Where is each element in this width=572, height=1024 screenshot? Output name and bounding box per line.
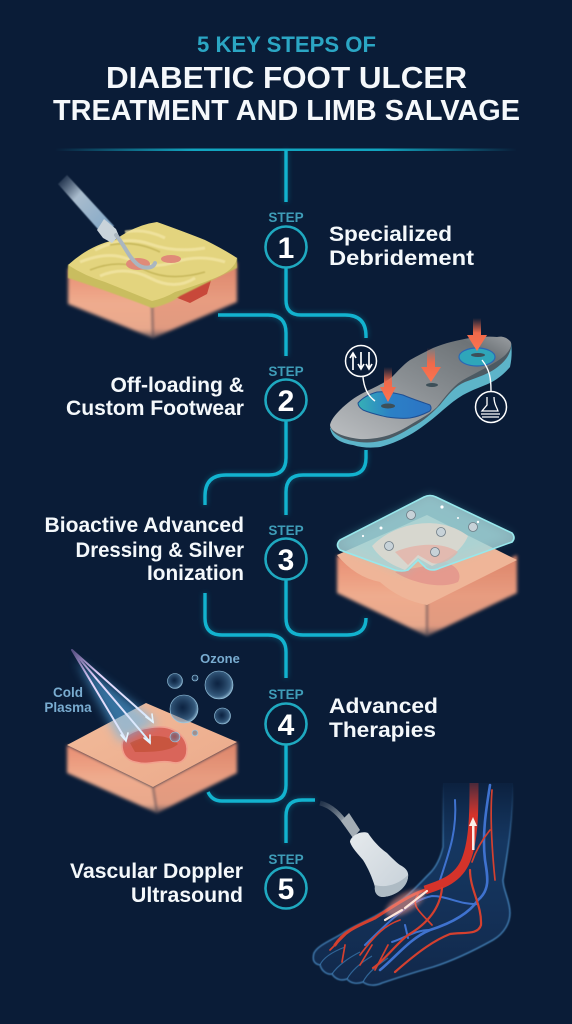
step 4 label (329, 695, 438, 742)
insole base (330, 343, 512, 448)
step 4 marker (266, 687, 306, 744)
illustration: silver dressing on skin (337, 495, 517, 636)
step 2 marker: STEP (268, 364, 304, 379)
probe strain relief (341, 813, 360, 838)
foot silhouette (313, 783, 513, 985)
pressure shadows (381, 353, 485, 408)
flow arrow (469, 817, 477, 850)
step 5 marker: 5 (278, 873, 294, 906)
step 2 marker (266, 364, 306, 420)
illustration: cold plasma and ozone therapy (44, 650, 240, 813)
step 1 label: Specialized (329, 223, 452, 246)
plasma beam glow (76, 660, 158, 742)
step 5 label: Vascular Doppler (70, 860, 243, 883)
dressing sheet (338, 496, 514, 571)
label: cold plasma: Plasma (44, 700, 92, 715)
title: line two: TREATMENT AND LIMB SALVAGE (53, 95, 520, 127)
ozone bubbles (168, 671, 233, 742)
callout: pressure redistribution icon (346, 346, 376, 401)
foot outline (313, 783, 513, 985)
label: cold plasma: Cold (53, 685, 83, 700)
probe body (350, 832, 408, 897)
sparkles (362, 505, 479, 537)
title: line one: DIABETIC FOOT ULCER (106, 60, 467, 95)
step 3 label: Dressing & Silver (76, 539, 244, 562)
pressure arrows (380, 318, 487, 402)
skin block (337, 555, 427, 636)
title: eyebrow: 5 KEY STEPS OF (197, 32, 376, 57)
exposed wound patches (126, 258, 150, 270)
title block (53, 32, 520, 127)
step 1 marker (266, 210, 306, 268)
step 5 label: Ultrasound (131, 884, 243, 907)
silver ions (384, 510, 478, 556)
toe separators (320, 947, 388, 982)
step 4 label: Therapies (329, 719, 436, 742)
callout: foot icon (476, 360, 506, 422)
heel pad (459, 348, 495, 366)
insole dark rim (330, 343, 511, 442)
step 2 label (66, 374, 244, 420)
header divider (55, 148, 517, 151)
step 2 marker: 2 (278, 385, 294, 418)
probe cable (320, 803, 347, 825)
step 4 marker: STEP (268, 687, 304, 702)
step 1 label (329, 223, 474, 270)
step 5 marker: STEP (268, 852, 304, 867)
veins (365, 785, 490, 970)
step 2 label: Custom Footwear (66, 397, 244, 420)
insole surface (330, 337, 511, 439)
plasma beam arrows (72, 650, 153, 743)
wound (395, 562, 459, 585)
slough rim (68, 258, 237, 308)
illustration: foot vasculature and Doppler probe (313, 783, 513, 985)
wound (122, 727, 187, 763)
label: cold plasma (44, 685, 92, 715)
arterial branches (330, 790, 495, 972)
Doppler highlight (381, 884, 429, 922)
step 5 label (70, 860, 243, 907)
step 3 label: Ionization (147, 562, 244, 585)
step 3 marker: 3 (278, 544, 294, 577)
step 3 marker: STEP (268, 523, 304, 538)
step 4 marker: 4 (278, 709, 295, 742)
step 1 label: Debridement (329, 247, 474, 270)
main artery (425, 783, 474, 890)
step 3 label (44, 514, 244, 585)
step 5 marker (266, 852, 306, 908)
forefoot pad (358, 392, 431, 418)
illustration: debridement of wound (58, 175, 237, 338)
skin block sides (68, 268, 153, 338)
step 4 label: Advanced (329, 695, 438, 718)
dressing glow (337, 495, 514, 572)
step 2 label: Off-loading & (110, 374, 244, 397)
connector network (205, 150, 366, 843)
yellow slough surface (68, 222, 237, 301)
step 1 marker: 1 (278, 232, 294, 265)
skin block (67, 745, 157, 813)
step 3 marker (266, 523, 306, 580)
illustration: custom insole (330, 318, 512, 448)
step 3 label: Bioactive Advanced (44, 514, 244, 537)
scraper instrument (58, 175, 155, 268)
wound cut (175, 277, 212, 303)
step 1 marker: STEP (268, 210, 304, 225)
label: ozone: Ozone (200, 651, 240, 666)
